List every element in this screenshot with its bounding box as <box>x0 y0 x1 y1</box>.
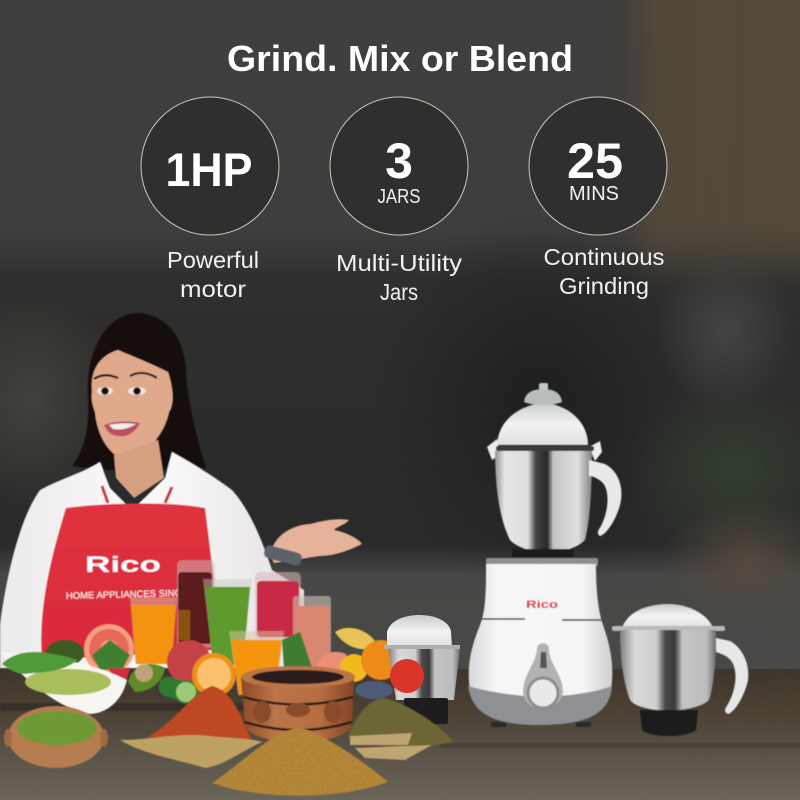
papad left <box>120 735 262 768</box>
banana <box>335 628 377 649</box>
avocado half <box>128 664 165 692</box>
apple <box>167 640 211 684</box>
fruit pile <box>46 624 401 706</box>
hair <box>72 313 206 470</box>
motor body <box>469 564 612 706</box>
caption: Powerful motor: motor <box>180 276 246 302</box>
jar base <box>640 710 698 736</box>
caption: Multi-Utility Jars: Jars <box>380 279 418 305</box>
pink glass <box>293 596 331 668</box>
jar lid <box>622 604 713 628</box>
presenter in red apron <box>0 313 362 668</box>
orange glass <box>130 597 177 664</box>
apron text: HOME APPLIANCES SINCE 19 <box>66 587 201 602</box>
orange <box>361 640 401 680</box>
stat: 3 jars <box>330 97 468 305</box>
unit: MINS: MINS <box>569 183 619 205</box>
orange slice <box>192 653 236 697</box>
caption: Powerful motor <box>167 247 259 302</box>
caption: Continuous Grinding: Grinding <box>559 273 649 299</box>
dark juice jug <box>177 560 215 648</box>
avocado dark <box>46 640 84 666</box>
grapefruit right <box>316 652 350 672</box>
value: 1HP: 1HP <box>166 143 252 196</box>
basil leaves <box>2 652 78 674</box>
blueberries <box>355 681 393 699</box>
jar handle <box>589 460 621 536</box>
mint right <box>282 632 312 668</box>
wooden barrel of peppercorns <box>241 666 355 743</box>
stat: 25 mins <box>529 97 667 299</box>
jar handle <box>716 638 748 714</box>
green sauce boat <box>0 652 127 714</box>
papads and jaggery pile <box>120 727 432 796</box>
circle: 1HP <box>141 97 279 235</box>
circle: 3 jars <box>330 97 468 235</box>
face <box>92 350 173 460</box>
title: Grind. Mix or Blend <box>227 38 573 79</box>
papad right <box>350 733 412 745</box>
apron text: Rico <box>85 552 161 577</box>
caption: Multi-Utility Jars: Multi-Utility <box>336 250 463 276</box>
tomato <box>390 659 424 693</box>
bracelet <box>263 544 303 567</box>
unit: JARS: JARS <box>378 186 420 208</box>
smile <box>104 421 140 436</box>
main mixer grinder with large jar <box>468 383 621 727</box>
red apron <box>41 503 214 660</box>
circle: 25 mins <box>529 97 667 235</box>
hand <box>270 519 362 563</box>
wooden table <box>0 669 800 800</box>
value: 3: 3 <box>385 133 413 189</box>
eyes and brows <box>94 373 157 395</box>
jar rim <box>496 446 594 451</box>
strawberry <box>108 668 130 695</box>
terracotta bowl with chutney <box>4 706 108 768</box>
value: 25: 25 <box>567 133 623 189</box>
jar body <box>620 630 716 710</box>
stat: 1HP powerful motor <box>141 97 279 302</box>
brand logo: Rico <box>526 599 558 611</box>
jar clamps <box>487 439 500 460</box>
medium steel jar <box>612 604 748 736</box>
slots <box>480 618 525 620</box>
caption: Continuous Grinding: Continuous <box>544 244 664 270</box>
cucumbers <box>156 674 202 706</box>
apron text <box>66 552 201 602</box>
glasses of juice <box>130 560 331 695</box>
green glass <box>203 579 252 665</box>
red glass <box>255 572 301 640</box>
caption: Powerful motor: Powerful <box>167 247 259 273</box>
control knob <box>523 643 563 709</box>
grapefruit <box>84 624 134 674</box>
jar dome lid <box>497 383 588 445</box>
grey base <box>468 686 612 725</box>
orange small glass <box>229 631 284 695</box>
jaggery pile <box>212 727 388 796</box>
white shirt <box>0 452 304 668</box>
caption: Continuous Grinding <box>544 244 664 299</box>
mint <box>92 640 130 670</box>
caption: Multi-Utility Jars <box>336 250 463 305</box>
red chilli powder and green herb powder <box>148 686 454 747</box>
jar body <box>495 451 592 552</box>
base collar <box>486 558 598 566</box>
feet <box>491 722 506 727</box>
small steel jar behind tomato <box>384 615 460 724</box>
